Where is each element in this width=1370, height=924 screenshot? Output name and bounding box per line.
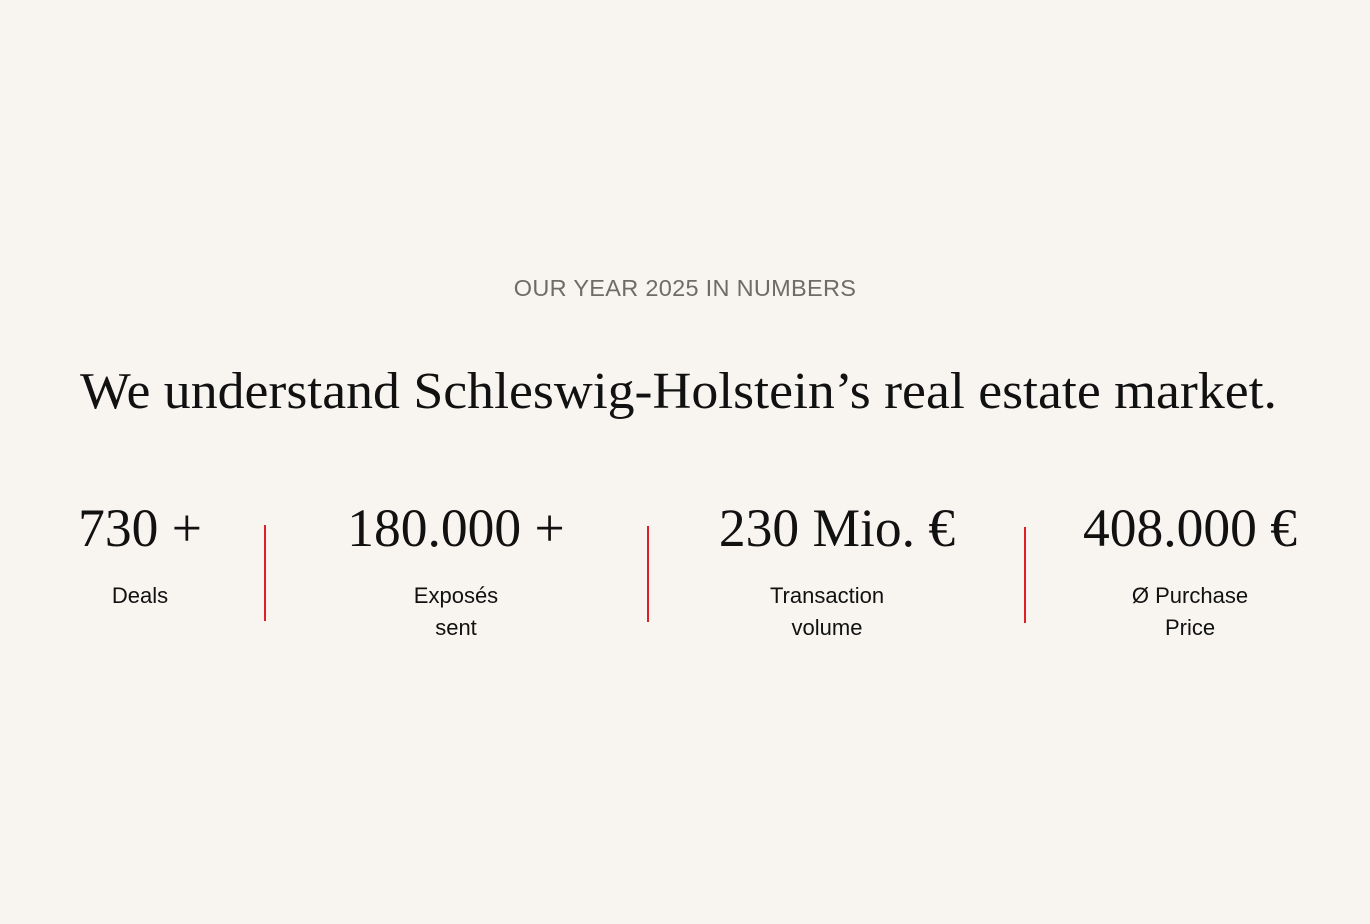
stat: purchase price: Ø Purchase	[1132, 583, 1248, 608]
divider 1	[264, 525, 266, 621]
stat: transaction volume: volume	[792, 615, 862, 640]
stat: deals: 730 +	[78, 498, 202, 558]
stat: exposes: sent	[435, 615, 477, 640]
subtitle: OUR YEAR 2025 IN NUMBERS	[514, 275, 856, 301]
divider 2	[647, 526, 649, 622]
stat: transaction volume: 230 Mio. €	[719, 498, 955, 558]
stat: purchase price: Price	[1165, 615, 1215, 640]
stat: transaction volume: Transaction	[770, 583, 884, 608]
stat: exposes: 180.000 +	[347, 498, 565, 558]
divider 3	[1024, 527, 1026, 623]
title: We understand Schleswig-Holstein’s real estate market.	[80, 363, 1277, 420]
stat: transaction volume	[719, 498, 955, 640]
stat: exposes: Exposés	[414, 583, 498, 608]
stat: exposes	[347, 498, 565, 640]
stat: deals: Deals	[112, 583, 168, 608]
stat: purchase price	[1083, 498, 1297, 640]
stat: purchase price: 408.000 €	[1083, 498, 1297, 558]
stat: deals	[78, 498, 202, 608]
